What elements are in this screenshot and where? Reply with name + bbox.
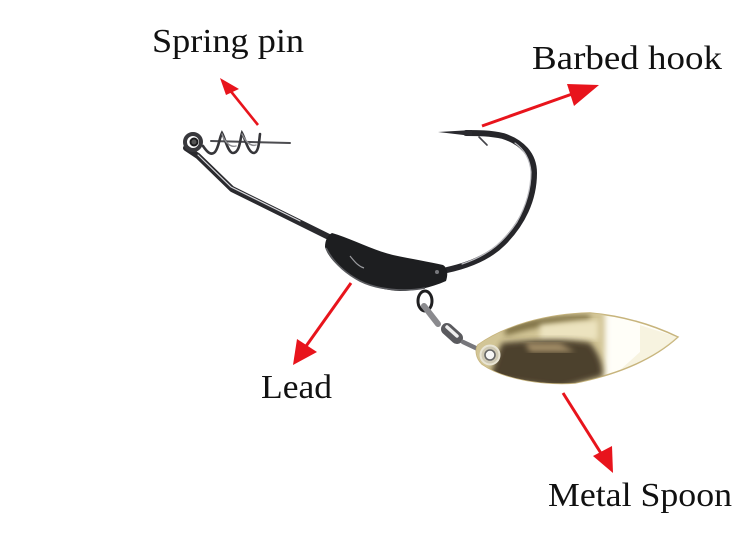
label: metal spoon: Metal Spoon xyxy=(548,477,732,514)
icon: metal spoon xyxy=(476,312,680,384)
arrow: lead xyxy=(293,283,351,365)
spring pin coil xyxy=(203,133,290,154)
label: spring pin: Spring pin xyxy=(152,23,304,60)
arrow: metal spoon xyxy=(563,393,613,473)
icon: hook with spring pin xyxy=(185,130,534,350)
arrow: barbed hook xyxy=(482,84,599,126)
hook point xyxy=(438,130,472,136)
lead weight xyxy=(325,233,447,291)
arrow: spring pin xyxy=(220,78,258,125)
hook shank and eye xyxy=(185,134,335,240)
barbed hook bend and point xyxy=(447,133,534,270)
label: lead: Lead xyxy=(261,369,332,406)
swivel connector xyxy=(418,291,480,350)
infographic: weedless hook parts diagram xyxy=(154,30,732,513)
label: barbed hook: Barbed hook xyxy=(532,40,722,77)
